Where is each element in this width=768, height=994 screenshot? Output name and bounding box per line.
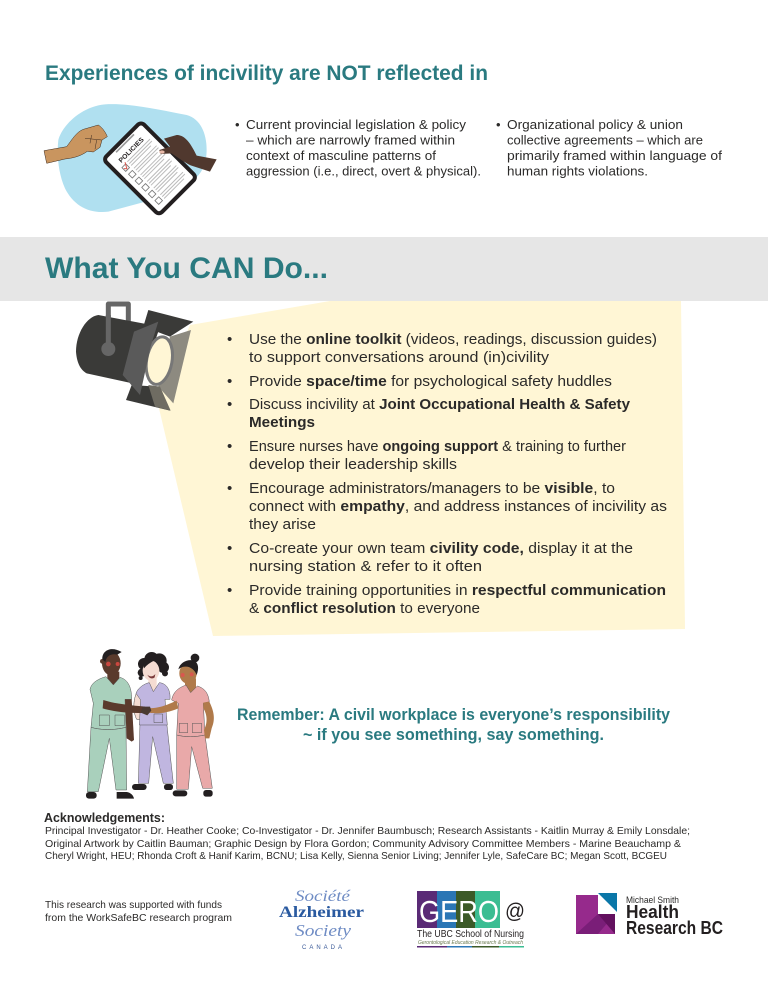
- figure: purple nurse: [132, 652, 173, 790]
- list item: training: •: [227, 582, 232, 599]
- text block: funding note: from the WorkSafeBC research program: [45, 912, 232, 924]
- list item: visible managers: they arise: [249, 516, 316, 533]
- text block: acknowledgements: Acknowledgements:: [44, 810, 165, 825]
- list item: ongoing support: [227, 438, 626, 473]
- logo: GERO at UBC School of Nursing: GERO: [419, 894, 499, 929]
- list item: joint meetings: •: [227, 396, 232, 413]
- list item: civility code: •: [227, 540, 232, 557]
- list item: civility code: [227, 540, 633, 575]
- text block: provincial legislation bullet: Current provincial legislation & policy: [246, 117, 467, 132]
- list item: online toolkit: Use the online toolkit (videos, readings, discussion guides): [249, 331, 657, 348]
- text block: acknowledgements: [44, 810, 690, 862]
- logo: Michael Smith Health Research BC: Research BC: [626, 917, 723, 938]
- logo: GERO at UBC School of Nursing: [417, 891, 525, 948]
- text block: provincial legislation bullet: context of masculine patterns of: [246, 148, 436, 163]
- logo: GERO at UBC School of Nursing: @: [505, 900, 525, 923]
- list item: training: & conflict resolution to everyone: [249, 600, 480, 617]
- text block: funding note: This research was supported with funds: [45, 899, 222, 911]
- list item: visible managers: connect with empathy, and address instances of incivility as: [249, 498, 667, 515]
- list item: joint meetings: [227, 396, 631, 431]
- text block: acknowledgements: Principal Investigator - Dr. Heather Cooke; Co-Investigator - Dr. Jennifer Baumbusch; Research Assistants - Kaitlin Murray & Emily Lonsdale;: [45, 826, 690, 837]
- logo: Michael Smith Health Research BC: Michael Smith: [626, 895, 679, 906]
- list item: visible managers: Encourage administrators/managers to be visible, to: [249, 480, 615, 497]
- list item: space and time: •: [227, 373, 232, 390]
- list item: joint meetings: Meetings: [249, 414, 315, 431]
- panel: spotlight beam: [157, 301, 685, 636]
- list item: ongoing support: develop their leadership skills: [249, 456, 457, 473]
- text block: organizational policy bullet: human rights violations.: [507, 164, 648, 178]
- text block: organizational policy bullet: Organizational policy & union: [507, 117, 683, 132]
- heading: experiences of incivility: Experiences of incivility are NOT reflected in: [45, 62, 488, 85]
- logo: Alzheimer Society: Alzheimer: [279, 904, 364, 921]
- logo: Alzheimer Society: Society: [295, 921, 352, 940]
- callout: remember: [237, 706, 671, 744]
- list item: online toolkit: •: [227, 331, 232, 348]
- list item: civility code: nursing station & refer to it often: [249, 558, 482, 575]
- callout: remember: Remember: A civil workplace is everyone’s responsibility: [237, 706, 671, 724]
- illustration: three nurses joining hands: [86, 649, 214, 799]
- text block: provincial legislation bullet: [235, 117, 481, 178]
- text block: provincial legislation bullet: •: [235, 117, 240, 132]
- list item: visible managers: •: [227, 480, 232, 497]
- text block: organizational policy bullet: [496, 117, 722, 178]
- logo: Michael Smith Health Research BC: [576, 893, 723, 938]
- list: actions: [227, 331, 667, 617]
- list item: online toolkit: [227, 331, 657, 366]
- icon: spotlight: [76, 304, 193, 411]
- logo: GERO at UBC School of Nursing: The UBC School of Nursing: [417, 929, 524, 940]
- band: what you can do: [0, 237, 768, 301]
- callout: remember: ~ if you see something, say something.: [303, 726, 604, 744]
- text block: provincial legislation bullet: aggression (i.e., direct, overt & physical).: [246, 164, 481, 178]
- logo: Michael Smith Health Research BC: Health: [626, 901, 679, 922]
- logo: Alzheimer Society: [279, 888, 364, 951]
- heading: what you can do: What You CAN Do...: [45, 252, 328, 285]
- list item: civility code: Co-create your own team civility code, display it at the: [249, 540, 633, 557]
- icon: hands holding policies tablet: POLICIES: [118, 136, 146, 165]
- logo: GERO at UBC School of Nursing: Gerontological Education Research & Outreach: [418, 940, 523, 946]
- list item: online toolkit: to support conversations around (in)civility: [249, 349, 550, 366]
- figure: pink nurse: [141, 654, 214, 797]
- list item: ongoing support: Ensure nurses have ongoing support & training to further: [249, 438, 626, 455]
- text block: provincial legislation bullet: – which are narrowly framed within: [246, 132, 455, 148]
- text block: organizational policy bullet: primarily framed within language of: [507, 148, 722, 163]
- icon: hands holding policies tablet: [44, 104, 217, 215]
- text block: organizational policy bullet: collective agreements – which are: [507, 132, 703, 148]
- list item: joint meetings: Discuss incivility at Joint Occupational Health & Safety: [249, 396, 631, 413]
- list item: training: Provide training opportunities in respectful communication: [249, 582, 666, 599]
- list item: ongoing support: •: [227, 438, 232, 455]
- list item: training: [227, 582, 666, 617]
- figure: green nurse: [86, 649, 147, 799]
- text block: acknowledgements: Original Artwork by Caitlin Bauman; Graphic Design by Flora Gordon; Community Advisory Committee Members - Marine Beauchamp &: [45, 839, 681, 850]
- logo: Alzheimer Society: Société: [295, 888, 351, 905]
- text block: organizational policy bullet: •: [496, 117, 501, 132]
- list item: space and time: Provide space/time for psychological safety huddles: [249, 373, 612, 390]
- text block: acknowledgements: Cheryl Wright, HEU; Rhonda Croft & Hanif Karim, BCNU; Lisa Kelly, Sienna Senior Living; Jennifer Lyle, SafeCare BC; Megan Scott, BCGEU: [45, 851, 667, 862]
- logo: Alzheimer Society: CANADA: [302, 945, 342, 951]
- list item: visible managers: [227, 480, 667, 533]
- text block: funding note: [45, 899, 232, 924]
